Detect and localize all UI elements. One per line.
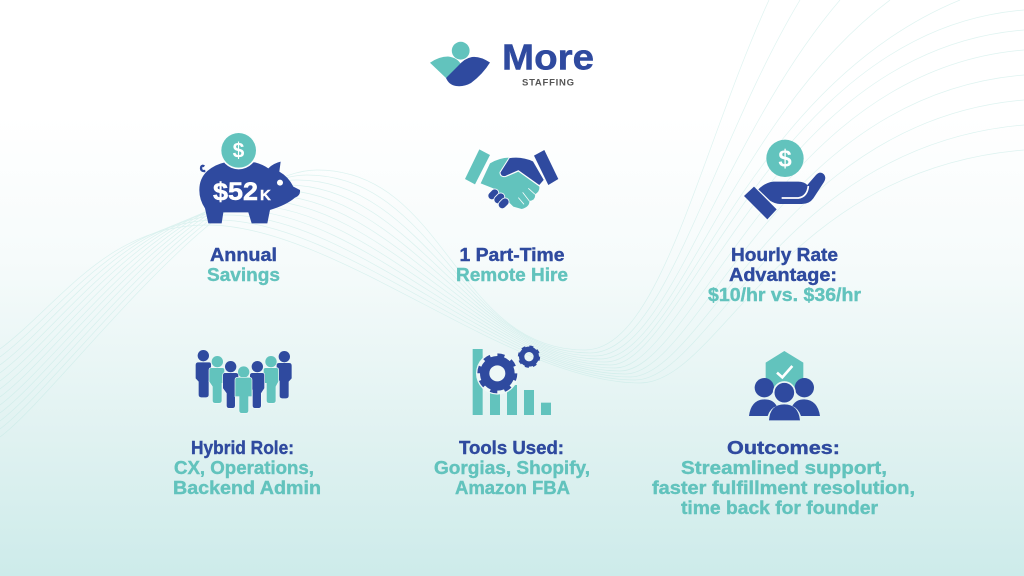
- icon: team with shield: [749, 351, 820, 420]
- label: hourly rate advantage: $10/hr vs. $36/hr: [708, 284, 861, 305]
- label: tools used: Tools Used:: [459, 437, 564, 458]
- logo wordmark: More: [502, 36, 594, 78]
- label: hourly rate advantage: Hourly Rate: [731, 244, 838, 265]
- label: part-time remote hire: 1 Part-Time: [460, 244, 564, 265]
- label: hybrid role: [173, 437, 321, 498]
- label: outcomes: Outcomes:: [727, 437, 840, 458]
- label: tools used: [434, 437, 590, 498]
- logo: More Staffing: [430, 36, 594, 88]
- coin dollar sign: $: [233, 140, 245, 162]
- panel: hourly rate advantage: [708, 140, 861, 305]
- label: annual savings: [207, 244, 280, 285]
- piggy amount: $52: [213, 178, 258, 206]
- label: part-time remote hire: [456, 244, 568, 285]
- panel: tools used: [434, 347, 590, 498]
- label: outcomes: [652, 437, 915, 518]
- label: outcomes: faster fulfillment resolution,: [652, 477, 915, 498]
- panel: annual savings: [199, 131, 300, 285]
- label: outcomes: time back for founder: [681, 497, 878, 518]
- piggy amount suffix: K: [260, 187, 271, 204]
- icon: hand holding coin: [744, 140, 825, 219]
- logo tagline: STAFFING: [522, 78, 574, 88]
- icon: piggy bank with $52K: [199, 131, 300, 223]
- label: hourly rate advantage: [708, 244, 861, 305]
- panel: outcomes: [652, 351, 915, 518]
- label: annual savings: Savings: [207, 264, 280, 285]
- label: hybrid role: Hybrid Role:: [191, 437, 294, 458]
- logo mark: [430, 42, 490, 86]
- label: hybrid role: CX, Operations,: [174, 457, 314, 478]
- icon: bar chart with gears: [473, 347, 551, 415]
- label: hybrid role: Backend Admin: [173, 477, 321, 498]
- label: outcomes: Streamlined support,: [681, 457, 887, 478]
- icon: handshake: [465, 149, 558, 210]
- label: annual savings: Annual: [210, 244, 277, 265]
- label: hourly rate advantage: Advantage:: [729, 264, 837, 285]
- label: tools used: Gorgias, Shopify,: [434, 457, 590, 478]
- panel: part-time remote hire: [456, 149, 568, 285]
- label: tools used: Amazon FBA: [455, 477, 570, 498]
- icon: group of people: [196, 350, 292, 413]
- label: part-time remote hire: Remote Hire: [456, 264, 568, 285]
- coin dollar sign: $: [778, 146, 792, 172]
- panel: hybrid role: [173, 350, 321, 498]
